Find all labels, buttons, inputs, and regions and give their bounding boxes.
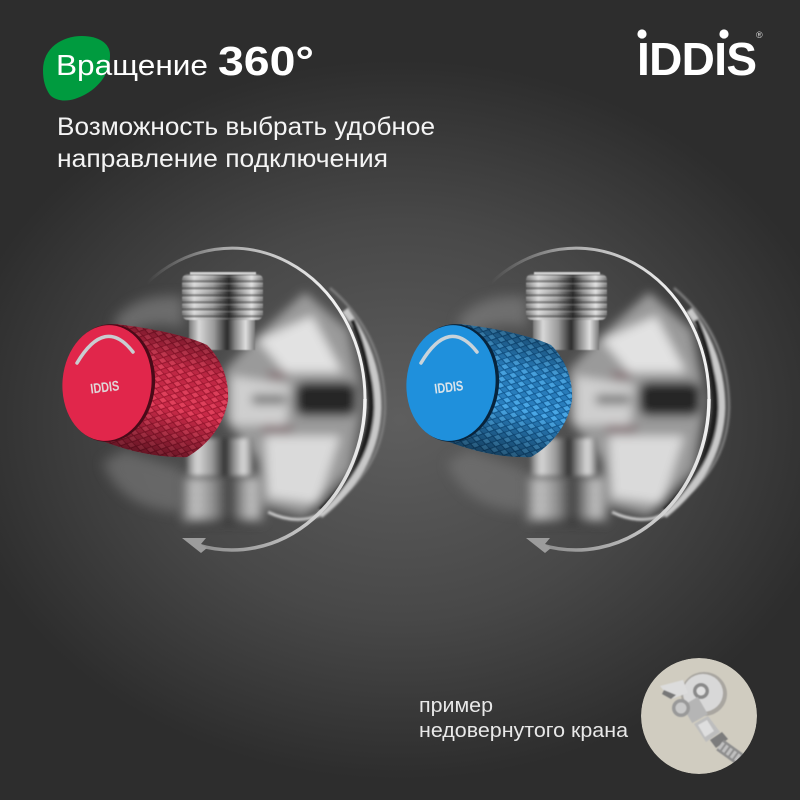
blue knob: IDDIS <box>433 377 464 397</box>
title: 360° <box>218 38 314 84</box>
subtitle: Возможность выбрать удобное <box>57 113 435 141</box>
caption: недовернутого крана <box>419 720 629 742</box>
example photo: installed valve <box>641 658 757 774</box>
green blob accent <box>43 36 110 101</box>
red valve <box>58 248 385 553</box>
blue valve <box>402 248 729 553</box>
subtitle: направление подключения <box>57 145 388 173</box>
rotation arrow: blue valve <box>491 248 709 553</box>
caption <box>419 695 629 742</box>
rotation arrow: red valve <box>147 248 365 553</box>
logo: IDDIS: IDDIS <box>637 33 757 85</box>
title <box>56 38 314 84</box>
logo: IDDIS: ® <box>756 30 763 40</box>
subtitle <box>57 113 435 173</box>
red knob <box>58 320 228 457</box>
title: Вращение <box>56 50 208 82</box>
blue knob <box>402 320 572 457</box>
caption: пример <box>419 695 493 717</box>
red knob: IDDIS <box>89 377 120 397</box>
